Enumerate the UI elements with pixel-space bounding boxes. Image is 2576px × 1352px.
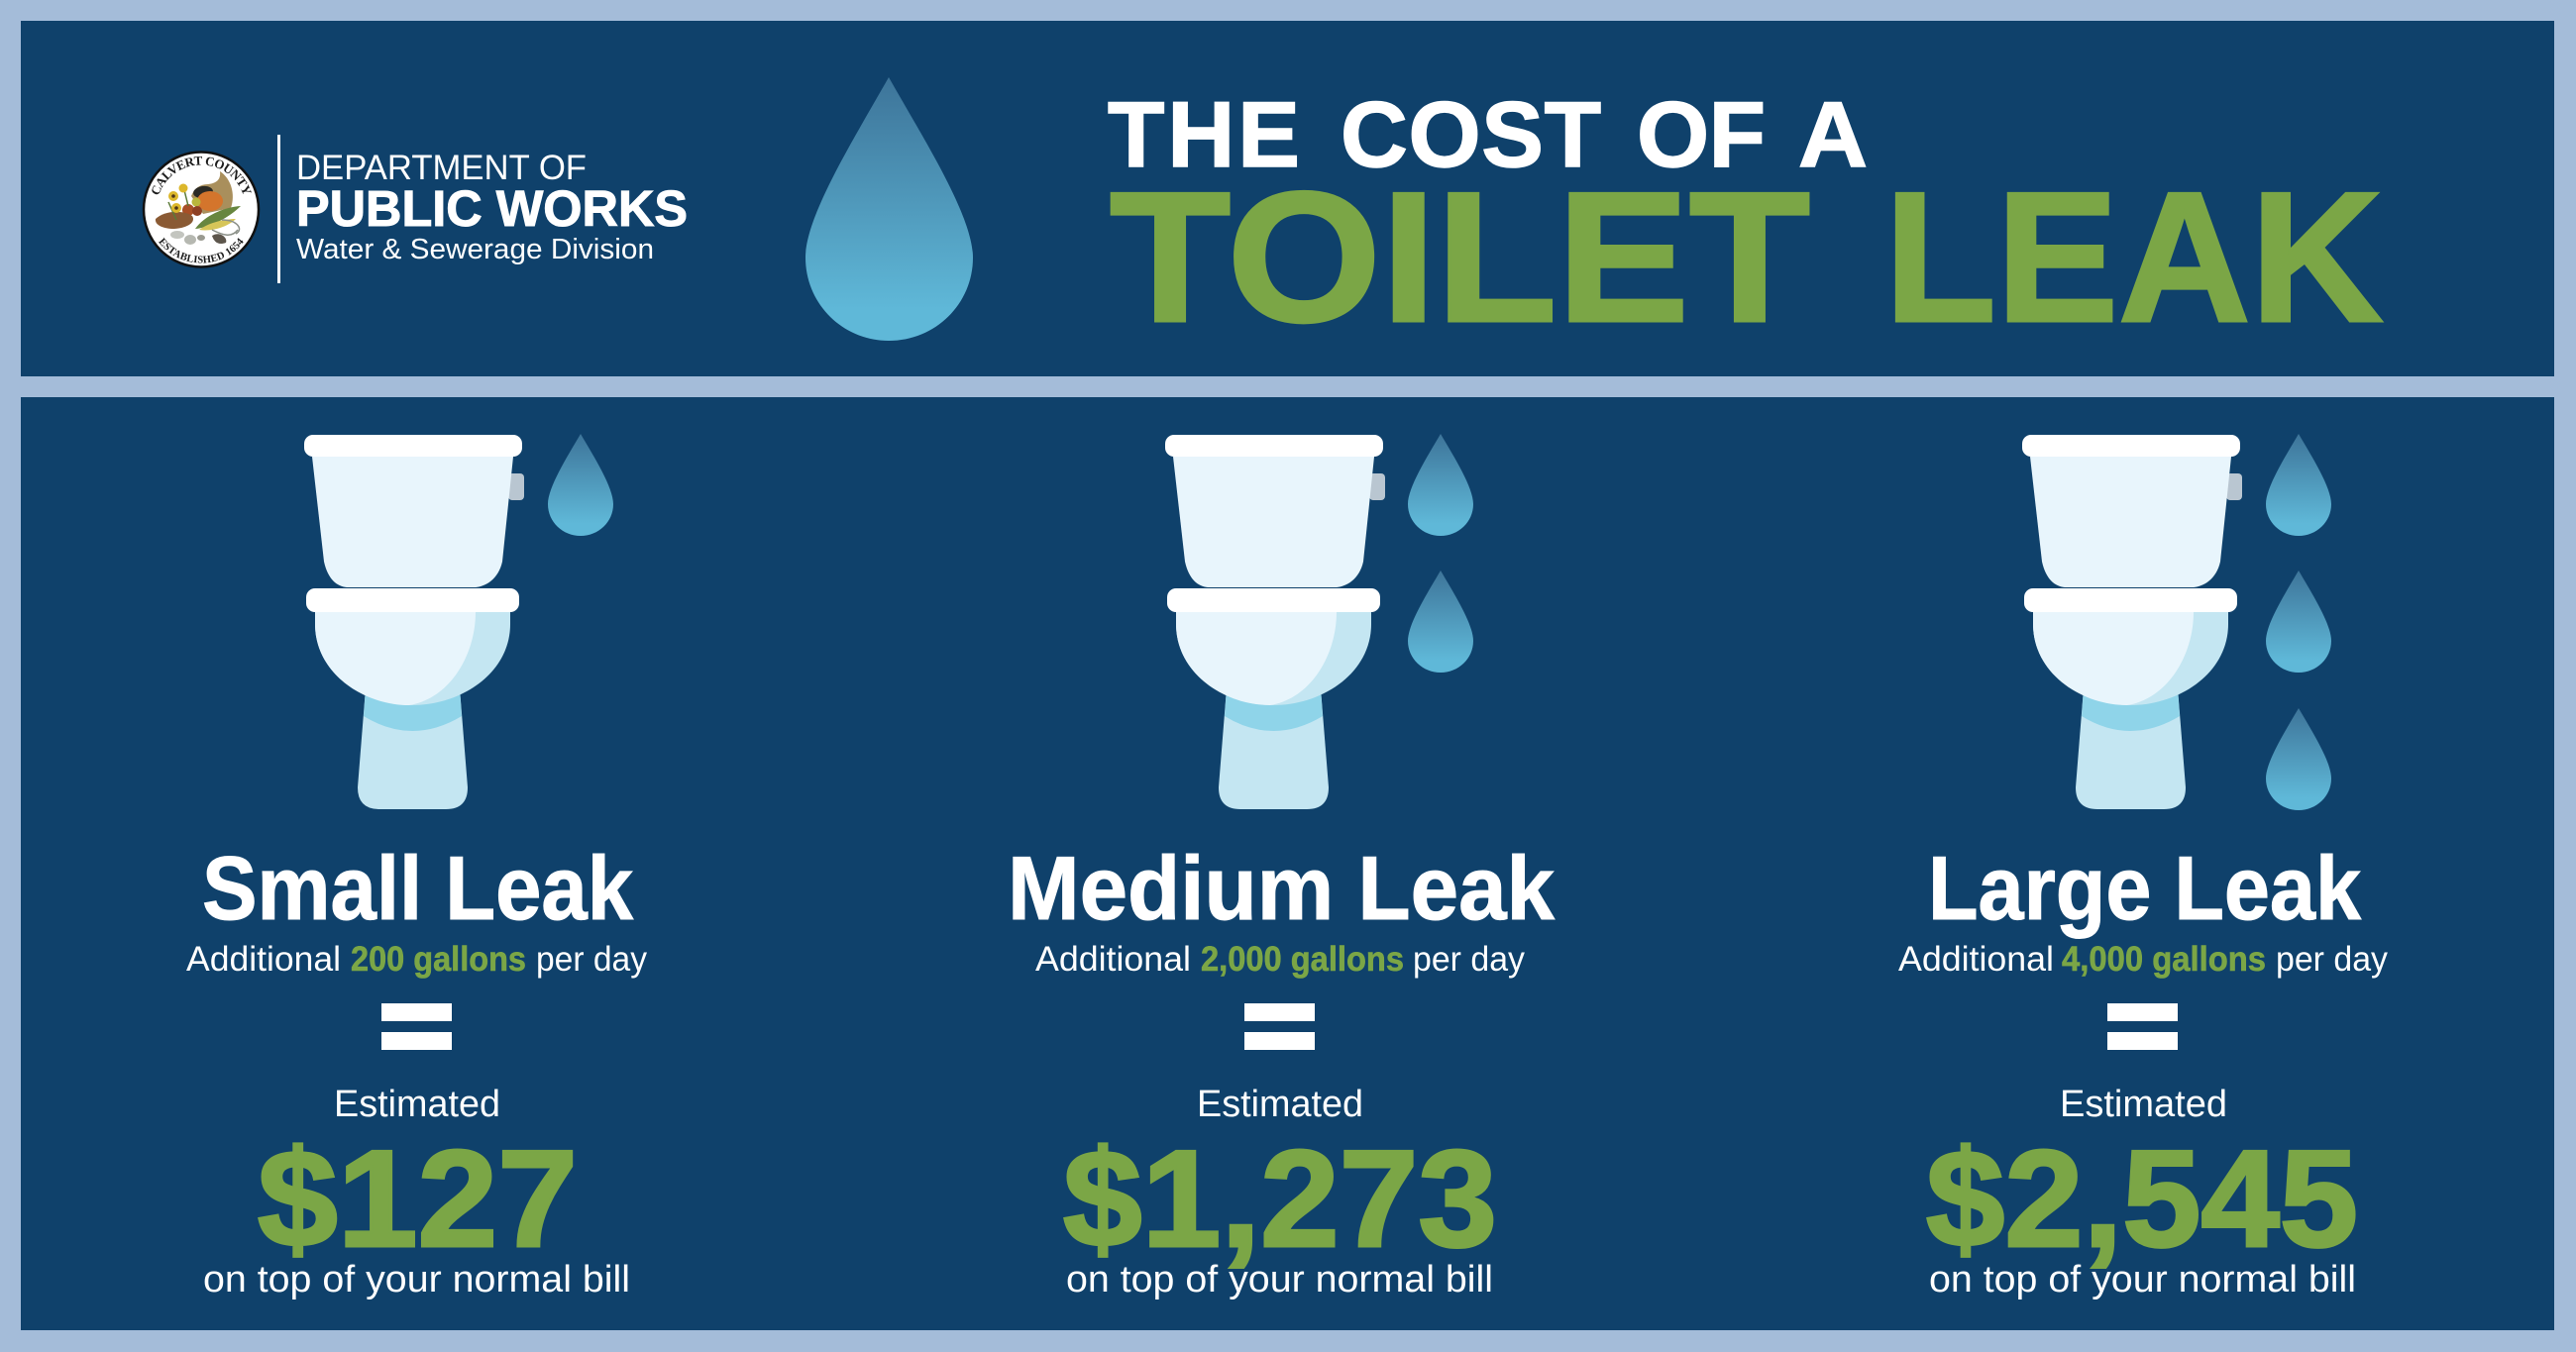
amount: 127: $127: [258, 1122, 578, 1276]
text: gallons per day: per day: [2276, 940, 2388, 979]
title: LEAK: [1884, 154, 2383, 361]
icon: toilet large: [2022, 435, 2242, 809]
heading: small leak: Small Leak: [202, 839, 633, 939]
icon: three drops: [2266, 434, 2331, 810]
title: COST: [1341, 82, 1601, 186]
text: gallons per day: [1898, 940, 2388, 979]
text: gallons per day: per day: [536, 940, 647, 979]
title: TOILET: [1110, 154, 1810, 361]
logo text: department: [296, 149, 688, 265]
logo text: department: PUBLIC WORKS: [296, 180, 688, 237]
icon: large water drop: [805, 77, 973, 341]
logo text: department: Water & Sewerage Division: [296, 234, 654, 265]
icon: toilet small: [304, 435, 524, 809]
amount: 2,545: $2,545: [1926, 1122, 2358, 1276]
logo: Calvert County seal: CALVERT COUNTY: [152, 156, 252, 194]
icon: equals: [381, 1003, 452, 1050]
icon: two drops: [1408, 434, 1473, 673]
text: estimated: Estimated: [2060, 1084, 2227, 1125]
panel: header: [21, 21, 2554, 376]
title: THE: [1108, 82, 1300, 186]
title: [1108, 82, 2383, 361]
text: on top of bill: on top of your normal bill: [1929, 1259, 2356, 1300]
title: A: [1798, 82, 1868, 186]
column: medium leak: [1008, 434, 1555, 1300]
heading: large leak: Large Leak: [1928, 839, 2361, 939]
logo divider: [277, 135, 280, 283]
text: gallons per day: [1035, 940, 1525, 979]
icon: drop: [548, 434, 613, 536]
icon: equals: [1244, 1003, 1315, 1050]
text: gallons per day: 2,000 gallons: [1201, 940, 1404, 979]
text: gallons per day: [186, 940, 647, 979]
text: on top of bill: on top of your normal bill: [1066, 1259, 1493, 1300]
amount: 1,273: $1,273: [1063, 1122, 1497, 1276]
column: large leak: [1898, 434, 2388, 1300]
text: gallons per day: per day: [1413, 940, 1525, 979]
title: OF: [1637, 82, 1766, 186]
logo: Calvert County seal: [143, 151, 260, 268]
icon: equals: [2107, 1003, 2178, 1050]
text: on top of bill: on top of your normal bill: [203, 1259, 630, 1300]
text: gallons per day: Additional: [1035, 940, 1191, 979]
text: estimated: Estimated: [334, 1084, 500, 1125]
icon: toilet medium: [1165, 435, 1385, 809]
logo text: department: DEPARTMENT OF: [296, 149, 587, 187]
text: gallons per day: Additional: [1898, 940, 2054, 979]
text: gallons per day: 4,000 gallons: [2062, 940, 2266, 979]
heading: medium leak: Medium Leak: [1008, 839, 1555, 939]
text: gallons per day: Additional: [186, 940, 341, 979]
text: estimated: Estimated: [1197, 1084, 1363, 1125]
panel: leak comparison: [21, 397, 2554, 1330]
text: gallons per day: 200 gallons: [351, 940, 526, 979]
logo: Calvert County seal: ESTABLISHED 1654: [159, 238, 244, 263]
column: small leak: [186, 434, 647, 1300]
